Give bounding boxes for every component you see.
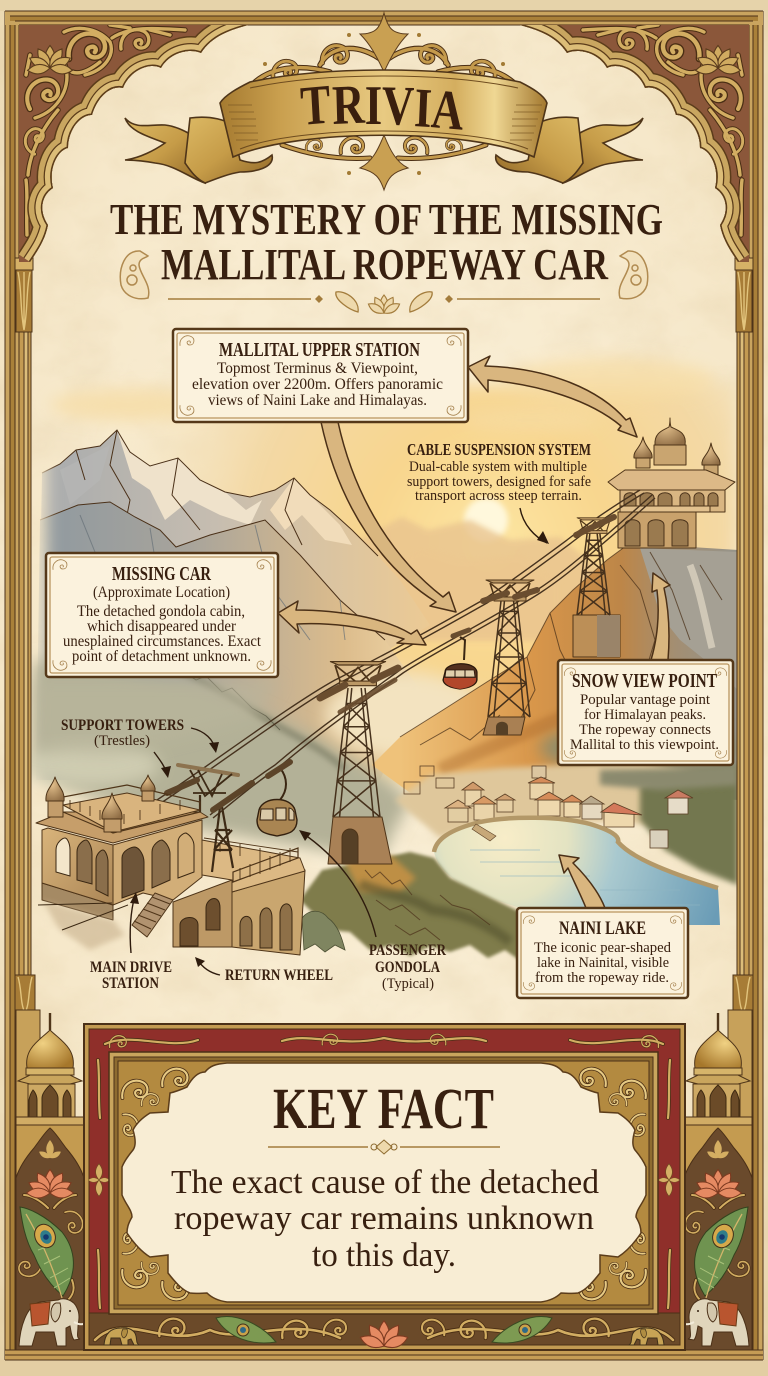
callout: missing car: (Approximate Location) — [93, 584, 230, 601]
gondola: passenger cabin — [257, 762, 297, 836]
heading: trivia: I — [413, 76, 433, 139]
tower: far cliff tower — [573, 517, 620, 657]
sky glow — [32, 385, 736, 785]
callout arrow: upper station to cable — [321, 422, 456, 612]
naini lake — [434, 818, 720, 925]
right lower block — [232, 870, 305, 955]
label: cable suspension system: transport across steep terrain. — [415, 488, 582, 504]
gondola: red missing car — [443, 630, 477, 689]
callout: naini lake: lake in Nainital, visible — [537, 955, 669, 971]
town by the lake — [395, 762, 738, 885]
callout: missing car: which disappeared under — [87, 618, 237, 635]
key fact statement: ropeway car remains unknown — [174, 1200, 594, 1237]
mist hills lower left — [34, 660, 410, 860]
heading: trivia: T — [299, 73, 332, 137]
heading: trivia: R — [331, 73, 367, 136]
heading: trivia: I — [365, 74, 382, 136]
lower drive station — [36, 765, 305, 955]
callout: missing car — [46, 553, 278, 677]
label: cable suspension system: support towers, designed for safe — [407, 474, 591, 490]
panel: key fact — [84, 1024, 685, 1351]
label: support towers — [61, 717, 184, 749]
turret domes — [48, 800, 63, 817]
trivia banner — [125, 13, 643, 190]
label: cable suspension system: Dual-cable system with multiple — [409, 459, 587, 475]
ornate corner: top right — [520, 25, 749, 262]
label: passenger gondola — [369, 942, 446, 992]
foreground trees — [300, 852, 530, 962]
callout: missing car: MISSING CAR — [112, 563, 211, 585]
ribbon centre — [220, 70, 547, 157]
callout: missing car: The detached gondola cabin, — [77, 603, 245, 620]
title divider ornament — [168, 292, 600, 316]
distant peach mountains — [350, 517, 600, 640]
callout: naini lake: NAINI LAKE — [559, 918, 646, 939]
callout arrow: naini lake — [559, 855, 605, 908]
callout: mallital upper station: Topmost Terminus & Viewpoint, — [217, 360, 418, 377]
icon: right paisley — [619, 251, 648, 299]
callout arrow: missing car — [278, 601, 426, 645]
tower: mid tower — [483, 580, 537, 735]
callout: snow view point: The ropeway connects — [579, 722, 711, 738]
label: passenger gondola: (Typical) — [382, 976, 434, 992]
callout: missing car: unesplained circumstances. Exact — [63, 633, 262, 650]
right column: dome tower and floral panel — [680, 1010, 752, 1350]
heading: key fact: KEY FACT — [273, 1076, 494, 1141]
callout: snow view point — [558, 660, 733, 765]
callout: naini lake: from the ropeway ride. — [535, 970, 669, 986]
inner gold frame — [109, 1052, 658, 1314]
thin arrow: support towers right — [191, 728, 219, 753]
banner lower ornament — [282, 135, 486, 190]
ropeway cables — [157, 490, 655, 818]
heading: trivia: V — [381, 74, 415, 137]
corner scroll ornaments — [122, 1069, 646, 1299]
callout: snow view point: Popular vantage point — [580, 692, 711, 708]
orange cliff and hillside — [372, 543, 740, 800]
red band ornaments — [98, 1034, 670, 1308]
callout: snow view point: SNOW VIEW POINT — [572, 670, 718, 692]
label: main drive station: STATION — [102, 975, 159, 992]
thin arrow: gondola — [299, 830, 376, 937]
label: cable suspension system — [407, 440, 591, 504]
right ribbon tail — [496, 117, 643, 183]
heading: trivia: A — [430, 77, 466, 142]
callout: naini lake — [517, 908, 688, 998]
label: support towers: SUPPORT TOWERS — [61, 717, 184, 734]
key fact statement: The exact cause of the detached — [171, 1164, 599, 1201]
outer frame — [84, 1024, 685, 1350]
label: main drive station: MAIN DRIVE — [90, 959, 172, 976]
label: return wheel: RETURN WHEEL — [225, 967, 333, 984]
callout: snow view point: for Himalayan peaks. — [584, 707, 706, 723]
label: main drive station — [90, 959, 172, 992]
key fact statement — [171, 1164, 599, 1274]
trees right of lake — [640, 765, 738, 885]
callout arrow: upper station to building — [468, 356, 637, 437]
upper station building — [608, 418, 735, 548]
pavilion arches — [56, 833, 194, 898]
icon: left paisley — [120, 251, 149, 299]
side ornaments on red band — [88, 1164, 680, 1196]
sun — [464, 498, 508, 542]
banner top ornament — [255, 13, 513, 82]
callout: missing car: point of detachment unknown. — [72, 648, 251, 665]
illustration: scenic background — [20, 358, 740, 860]
thin arrow: cable suspension — [520, 508, 549, 544]
trestle tower 1 — [167, 765, 252, 872]
label: support towers: (Trestles) — [94, 733, 150, 749]
heading: trivia — [299, 73, 466, 142]
distant clouds — [50, 358, 715, 434]
key fact divider — [268, 1140, 500, 1154]
label: cable suspension system: CABLE SUSPENSION SYSTEM — [407, 440, 591, 459]
thin arrow: support towers left — [154, 752, 171, 778]
title — [110, 195, 663, 289]
callout: mallital upper station: MALLITAL UPPER STATION — [219, 339, 420, 361]
callout: naini lake: The iconic pear-shaped — [534, 940, 671, 956]
callout: mallital upper station — [173, 329, 468, 422]
key fact statement: to this day. — [312, 1237, 456, 1274]
cream interior — [122, 1063, 646, 1302]
callout: mallital upper station: elevation over 2200m. Offers panoramic — [192, 376, 443, 393]
lower floral band — [89, 1313, 680, 1345]
label: passenger gondola: PASSENGER — [369, 942, 446, 959]
left column: dome tower and floral panel — [16, 1010, 88, 1350]
stairs — [132, 893, 173, 937]
callout arrow: snow view point — [651, 573, 670, 660]
callout: mallital upper station: views of Naini Lake and Himalayas. — [208, 392, 427, 409]
main pavilion — [42, 883, 113, 920]
title: MALLITAL ROPEWAY CAR — [161, 240, 609, 289]
thin arrow: return wheel — [195, 957, 220, 975]
callout: snow view point: Mallital to this viewpoint. — [570, 737, 719, 753]
thin arrow: main drive — [130, 892, 139, 953]
label: passenger gondola: GONDOLA — [375, 959, 440, 976]
tower: tall foreground tower — [320, 662, 398, 864]
ornate corner: top left — [19, 25, 248, 262]
left ribbon tail — [125, 117, 272, 183]
left mountain group — [36, 430, 430, 780]
